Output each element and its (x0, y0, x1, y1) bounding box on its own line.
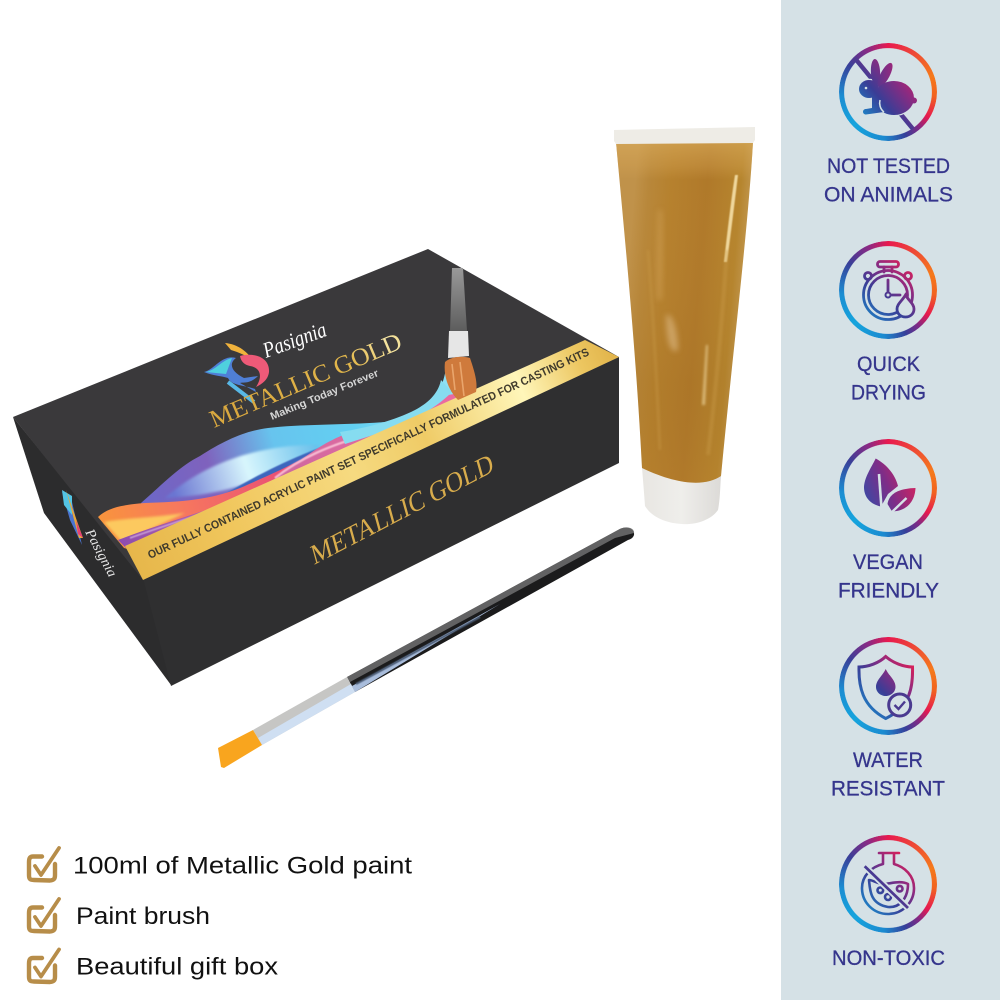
box front face (143, 357, 619, 686)
box top title: METALLIC GOLD (206, 328, 406, 434)
label: vegan friendly: VEGAN (853, 551, 923, 574)
box top face (13, 249, 619, 580)
paint brush (218, 527, 634, 768)
checklist item 1 (29, 848, 412, 880)
label: quick drying (851, 353, 926, 404)
label: water resistant: RESISTANT (831, 778, 945, 800)
box tagline: Making Today Forever (269, 367, 380, 423)
label: not tested on animals (824, 155, 953, 206)
icon: vegan leaves (839, 439, 937, 537)
item 3 text: Beautiful gift box (76, 954, 278, 980)
check icon 2 (29, 899, 59, 932)
label: water resistant: WATER (853, 749, 923, 772)
icon: non-toxic flask (839, 835, 937, 933)
label: non-toxic: NON-TOXIC (832, 947, 945, 970)
tube body (616, 142, 753, 483)
tube highlights (648, 175, 738, 455)
checklist item 3 (29, 950, 278, 982)
panel: product features sidebar (781, 0, 1000, 1000)
brush artwork on box (445, 268, 477, 400)
paint swoosh artwork (98, 373, 456, 549)
strip text: OUR FULLY CONTAINED ACRYLIC PAINT SET SPECIFICALLY FORMULATED FOR CASTING KITS (146, 347, 591, 562)
icon: not tested on animals (839, 43, 937, 141)
brush ferrule (253, 677, 355, 745)
label: vegan friendly (838, 551, 939, 602)
logo wordmark: Pasignia (258, 317, 330, 363)
label: not tested on animals: ON ANIMALS (824, 184, 953, 206)
tube white base cap (642, 468, 721, 524)
brush bristles (218, 730, 262, 768)
box side logo (62, 490, 119, 580)
item 1 text: 100ml of Metallic Gold paint (73, 852, 412, 880)
label: water resistant (831, 749, 945, 800)
item 2 text: Paint brush (76, 903, 210, 930)
box front title: METALLIC GOLD (308, 447, 497, 571)
gold label strip (125, 340, 619, 580)
brush handle (347, 527, 634, 692)
box side logo: Pasignia (81, 526, 119, 580)
check icon 1 (29, 848, 59, 880)
gift box (13, 249, 619, 686)
tube crimped top (614, 127, 755, 144)
checklist (29, 848, 412, 982)
logo mark (204, 343, 269, 402)
label: not tested on animals: NOT TESTED (827, 155, 950, 178)
icon: quick drying stopwatch (839, 241, 937, 339)
paint tube (614, 127, 755, 524)
box left face (13, 417, 171, 685)
icon: water resistant shield (839, 637, 937, 735)
label: vegan friendly: FRIENDLY (838, 580, 939, 602)
label: quick drying: DRYING (851, 382, 926, 404)
check icon 3 (29, 950, 59, 982)
label: quick drying: QUICK (857, 353, 920, 376)
checklist item 2 (29, 899, 210, 932)
panel: product photo area (13, 127, 755, 984)
